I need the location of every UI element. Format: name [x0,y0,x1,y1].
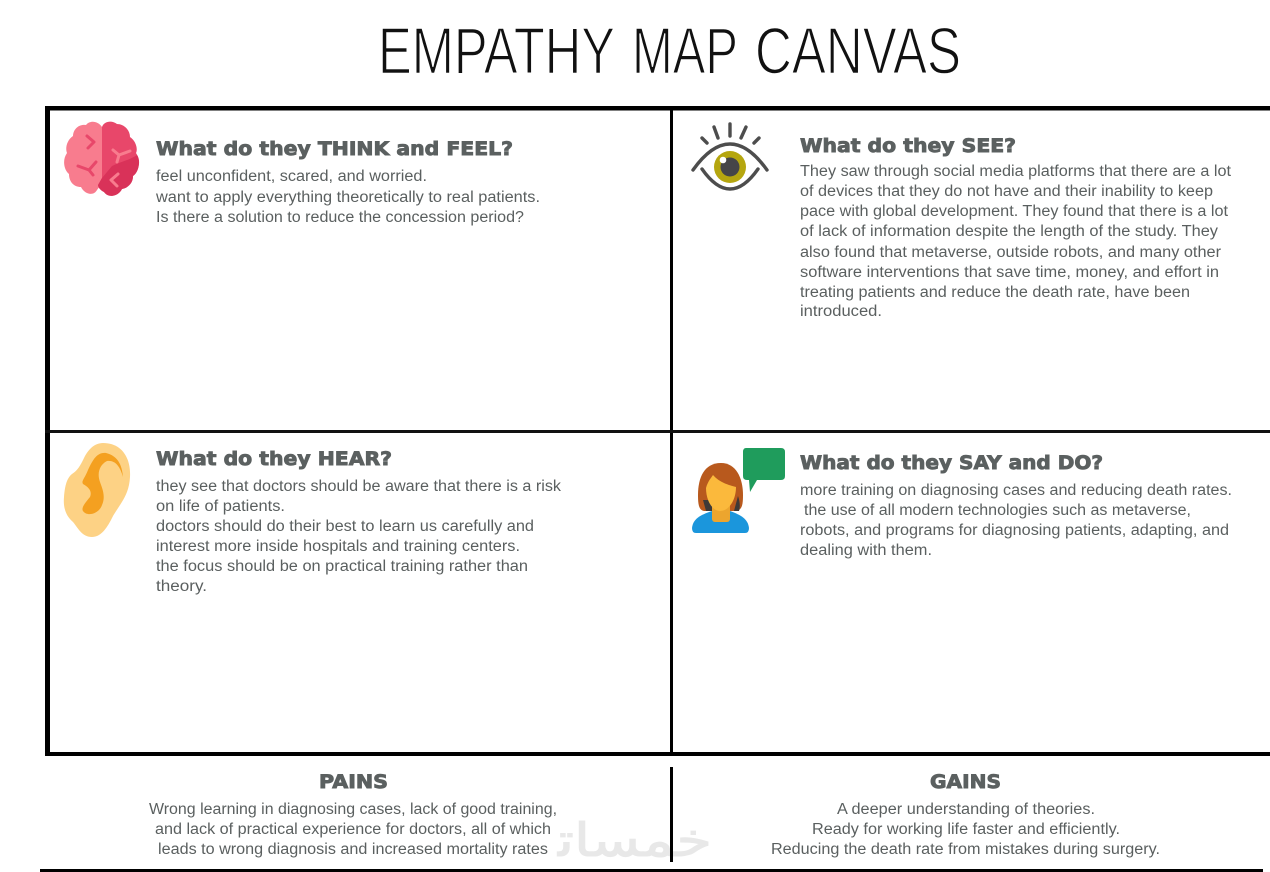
text block: of devices that they do not have and their inability to keep [800,183,1213,200]
icon: eye [693,124,767,189]
text block: interest more inside hospitals and training centers. [156,538,520,555]
bottom rule [40,869,1263,872]
text block: the focus should be on practical training rather than [156,558,528,575]
text block: and lack of practical experience for doctors, all of which [155,821,551,838]
text block: software interventions that save time, money, and effort in [800,264,1219,281]
text block: they see that doctors should be aware that there is a risk [156,478,561,495]
text block: Reducing the death rate from mistakes during surgery. [771,841,1160,858]
text block: want to apply everything theoretically to real patients. [155,189,540,206]
title: EMPATHY [378,14,615,88]
text block: of lack of information despite the length of the study. They [800,223,1218,240]
heading: PAINS [319,771,388,793]
icon: brain [64,122,139,196]
title: MAP [632,14,738,88]
text block [800,163,1232,320]
text block: dealing with them. [800,542,932,559]
icon: ear [64,443,130,537]
heading: GAINS [930,771,1001,793]
text block: introduced. [800,303,882,320]
panel: say and do [692,448,1232,559]
text block [156,478,561,595]
heading: What do they THINK and FEEL? [156,138,513,160]
panel: hear [64,443,561,595]
text block: Wrong learning in diagnosing cases, lack of good training, [149,801,557,818]
panel: pains [149,771,557,858]
text block: Ready for working life faster and efficiently. [812,821,1120,838]
title: CANVAS [755,14,961,88]
text block: doctors should do their best to learn us carefully and [156,518,534,535]
text block [771,801,1160,858]
heading: What do they HEAR? [156,448,392,470]
text block: They saw through social media platforms that there are a lot [800,163,1232,180]
text block: on life of patients. [156,498,285,515]
text block [800,482,1232,559]
icon: person with speech bubble [692,448,785,533]
text block: also found that metaverse, outside robots, and many other [800,244,1221,261]
text block: robots, and programs for diagnosing patients, adapting, and [800,522,1229,539]
text block: theory. [156,578,207,595]
text block: feel unconfident, scared, and worried. [156,168,427,185]
text block: Is there a solution to reduce the concession period? [156,209,524,226]
text block: leads to wrong diagnosis and increased mortality rates [158,841,548,858]
text block [155,168,540,226]
title [378,14,961,88]
panel: think and feel [64,122,540,226]
text block [149,801,557,858]
watermark: ﺗﺎﺴﻤﺧ [557,813,712,867]
text block: treating patients and reduce the death rate, have been [800,284,1190,301]
text block: more training on diagnosing cases and reducing death rates. [800,482,1232,499]
heading: What do they SAY and DO? [800,452,1103,474]
bottom divider [670,767,673,862]
heading: What do they SEE? [800,135,1016,157]
canvas grid frame [45,106,1270,756]
panel: gains [771,771,1160,858]
text block: pace with global development. They found that there is a lot [800,203,1229,220]
text block: the use of all modern technologies such as metaverse, [804,502,1191,519]
panel: see [693,124,1232,320]
text block: A deeper understanding of theories. [837,801,1095,818]
